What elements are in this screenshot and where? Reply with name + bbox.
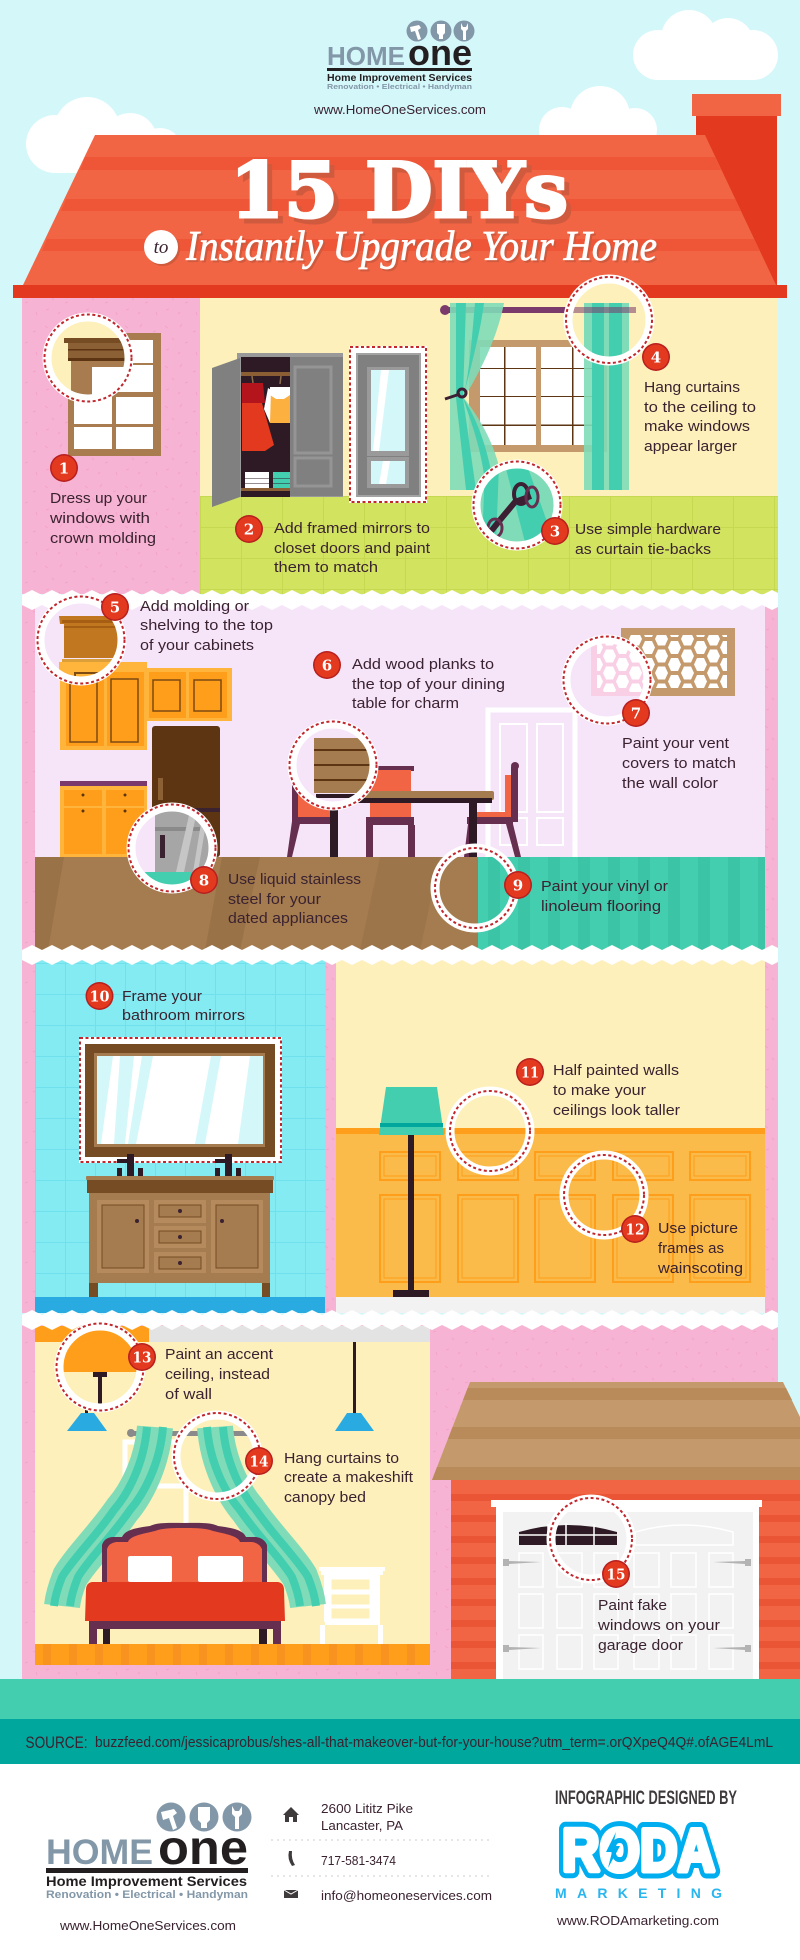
step 2 text: them to match: [274, 559, 378, 576]
step 13 text: [165, 1346, 274, 1403]
logo wordmark: Home Improvement Services: [327, 72, 472, 84]
step 7 badge: [622, 699, 650, 727]
step 7 text: covers to match: [622, 755, 736, 772]
step 14 text: [284, 1450, 414, 1506]
contact block: [271, 1801, 492, 1903]
cloud: middle: [539, 86, 657, 153]
step 12 text: frames as: [658, 1240, 724, 1257]
callout 11: half painted wall: [450, 1091, 530, 1171]
step 12 badge: [621, 1215, 649, 1243]
bed: [85, 1523, 285, 1644]
title: 15 DIYs: 15 DIYs: [235, 151, 573, 240]
step 3 text: Use simple hardware: [575, 521, 721, 538]
step 15 text: windows on your: [597, 1617, 720, 1634]
curtain rod: [440, 305, 639, 315]
source band: [0, 1719, 800, 1764]
vent cover: [621, 628, 735, 696]
step 1 text: crown molding: [50, 530, 156, 547]
step 15 badge: 15: [606, 1566, 626, 1584]
step 2 badge: 2: [244, 520, 254, 538]
title: [144, 146, 659, 272]
step 5 badge: [101, 593, 129, 621]
RODA logo: RODA: [562, 1817, 715, 1884]
grey ceiling: [149, 1326, 430, 1342]
teal floor: [478, 857, 765, 950]
step 13 text: of wall: [165, 1386, 212, 1403]
step 4 badge: [642, 343, 670, 371]
RODA url: www.RODAmarketing.com: [556, 1913, 719, 1928]
step 8 text: Use liquid stainless: [228, 871, 361, 888]
step 11 text: [553, 1062, 680, 1119]
source band: buzzfeed.com/jessicaprobus/shes-all-that-makeover-but-for-your-house?utm_term=.orQXpeQ4Q#.ofAGE4LmL: [95, 1735, 773, 1751]
garage roof: [432, 1382, 800, 1480]
logo wordmark: one: [408, 32, 472, 73]
callout 13: accent ceiling: [56, 1324, 144, 1412]
dotted dividers: [271, 1840, 491, 1876]
callout 8: stainless fridge: [128, 804, 216, 897]
footer logo wordmark: one: [158, 1822, 248, 1875]
step 7 badge: 7: [631, 704, 641, 722]
divider zigzag under floor 2: [22, 960, 778, 965]
floor divider 3: [22, 1310, 778, 1325]
callout 1: crown molding: [44, 314, 132, 417]
dining chairs: [287, 762, 521, 857]
step 10 badge: 10: [90, 988, 110, 1006]
chimney: [692, 94, 781, 288]
address: [321, 1801, 413, 1833]
MARKETING: MARKETING: [555, 1885, 722, 1901]
canopy curtain rod: [127, 1429, 244, 1437]
bathroom mirror: [79, 1037, 282, 1163]
lilac wall: [35, 605, 765, 857]
footer logo url: www.HomeOneServices.com: [59, 1918, 236, 1933]
floor 3 strips: [22, 960, 778, 1313]
step 2 text: [274, 520, 431, 576]
callout 9: painted floor: [435, 848, 515, 928]
step 10 text: bathroom mirrors: [122, 1007, 245, 1024]
step 15 text: [597, 1597, 720, 1654]
step 9 badge: 9: [513, 876, 523, 894]
step 12 text: [657, 1220, 743, 1277]
wall cream: [200, 298, 778, 496]
step 4 text: Hang curtains: [644, 379, 740, 396]
middle chair: [366, 766, 415, 857]
step 4 text: [644, 379, 756, 455]
step 14 badge: 14: [250, 1452, 268, 1470]
subtitle: Instantly Upgrade Your Home: [185, 224, 657, 270]
left chair: [287, 778, 335, 857]
logo wordmark: Renovation • Electrical • Handyman: [327, 82, 472, 91]
step 6 badge: [313, 651, 341, 679]
step 3 badge: 3: [550, 522, 560, 540]
footer logo wordmark: Home Improvement Services: [46, 1873, 247, 1889]
bedroom wall: [35, 1342, 430, 1665]
step 12 text: wainscoting: [657, 1260, 743, 1277]
step 8 text: dated appliances: [228, 910, 348, 927]
bathroom floor: [35, 1297, 325, 1313]
bathroom wall: [35, 960, 325, 1297]
floor 1 room: [22, 298, 778, 594]
faucets: [117, 1154, 241, 1176]
cloud: left: [26, 97, 182, 173]
address: 2600 Lititz Pike: [321, 1801, 413, 1816]
step 5 badge: 5: [110, 598, 120, 616]
side walls: [22, 605, 35, 950]
step 5 text: [140, 598, 273, 654]
step 10 text: Frame your: [122, 988, 202, 1005]
framed mirror closet door: [349, 346, 427, 503]
dining table: [316, 791, 494, 857]
RODA logo: RODA: [562, 1817, 715, 1884]
callout 5: cabinet molding: [38, 596, 124, 693]
step 3 text: as curtain tie-backs: [575, 541, 711, 558]
ground band: [0, 1679, 800, 1719]
step 2 text: Add framed mirrors to: [274, 520, 430, 537]
step 1 badge: 1: [59, 460, 69, 478]
closet with open door: [212, 353, 343, 507]
orange floor: [35, 1644, 430, 1665]
phone: 717-581-3474: [321, 1853, 396, 1868]
step 13 text: Paint an accent: [165, 1346, 274, 1363]
step 4 text: to the ceiling to: [644, 399, 756, 416]
step 11 badge: [516, 1058, 544, 1086]
callout 6: wood planks: [290, 722, 376, 808]
icon: house: [283, 1807, 299, 1822]
step 3 badge: [541, 517, 569, 545]
fake window: [519, 1523, 617, 1545]
floor lamp: [379, 1087, 444, 1297]
clothes: [241, 372, 290, 491]
icon: mail: [284, 1890, 298, 1898]
vanity: [86, 1176, 274, 1297]
bedroom: [35, 1326, 430, 1665]
step 14 text: Hang curtains to: [284, 1450, 399, 1467]
wainscoting: [336, 1128, 765, 1297]
step 2 badge: [235, 515, 263, 543]
door: [488, 710, 575, 857]
canopy curtains: [54, 1427, 316, 1606]
step 12 badge: 12: [626, 1220, 644, 1238]
window with crown molding: [68, 333, 161, 456]
right curtain: [584, 303, 629, 490]
left curtain: [450, 303, 504, 490]
logo icons: [406, 20, 474, 42]
designer credit: [555, 1788, 737, 1928]
footer logo icons: [156, 1802, 252, 1832]
step 7 text: Paint your vent: [622, 735, 730, 752]
step 11 text: ceilings look taller: [553, 1102, 680, 1119]
footer logo wordmark: [46, 1822, 248, 1901]
step 13 badge: 13: [132, 1348, 152, 1366]
accent ceiling: [35, 1326, 149, 1342]
step 10 badge: [86, 982, 114, 1010]
divider zigzag under floor 1: [22, 605, 778, 610]
upper cabinets: [60, 662, 232, 750]
step 5 text: shelving to the top: [140, 617, 273, 634]
roof: [23, 135, 776, 285]
window behind curtains: [469, 340, 607, 452]
subtitle: to: [154, 237, 168, 258]
step 3 text: [575, 521, 721, 558]
callout 15: fake window: [550, 1498, 632, 1580]
step 8 text: [228, 871, 361, 927]
address: Lancaster, PA: [321, 1818, 403, 1833]
step 5 text: Add molding or: [140, 598, 249, 615]
step 4 text: make windows: [644, 418, 750, 435]
bedroom window: [125, 1442, 247, 1534]
floor 4 wall: [22, 1325, 778, 1679]
yellow wall: [336, 960, 765, 1128]
green floor: [200, 496, 778, 594]
subtitle: Instantly Upgrade Your Home: [187, 226, 659, 272]
footer white: [0, 1764, 800, 1960]
left canopy curtain: [54, 1427, 163, 1606]
step 1 text: windows with: [49, 510, 150, 527]
title: 15 DIYs: 15 DIYs: [230, 146, 568, 235]
footer logo wordmark: HOME: [46, 1833, 153, 1872]
step 12 text: Use picture: [658, 1220, 738, 1237]
tie-back: [445, 389, 466, 399]
eave: [13, 285, 787, 298]
callout 7: painted vent: [564, 635, 651, 724]
step 13 badge: [128, 1343, 156, 1371]
step 8 text: steel for your: [228, 891, 321, 908]
callout 4: curtains to ceiling: [566, 277, 652, 383]
footer logo wordmark: Renovation • Electrical • Handyman: [46, 1889, 248, 1901]
step 1 text: [49, 490, 156, 547]
refrigerator: [152, 726, 220, 857]
garage wall: [451, 1480, 800, 1679]
footer logo: Home One: [46, 1802, 252, 1933]
callout 14: canopy curtain: [170, 1413, 260, 1510]
step 15 badge: [602, 1560, 630, 1588]
step 4 badge: 4: [651, 348, 661, 366]
lower cabinets: [60, 781, 147, 857]
step 9 text: Paint your vinyl or: [541, 878, 668, 895]
pillows: [128, 1556, 243, 1582]
step 5 text: of your cabinets: [140, 637, 254, 654]
right chair: [464, 762, 521, 857]
floor divider 1: [22, 590, 778, 605]
step 4 text: appear larger: [644, 438, 737, 455]
step 8 badge: 8: [199, 872, 209, 890]
step 6 text: [352, 656, 505, 712]
step 6 badge: 6: [322, 656, 332, 674]
step 1 badge: [50, 454, 78, 482]
step 7 text: [622, 735, 736, 792]
step 6 text: Add wood planks to: [352, 656, 494, 673]
step 9 badge: [504, 871, 532, 899]
step 7 text: the wall color: [622, 775, 718, 792]
logo url: www.HomeOneServices.com: [313, 102, 486, 117]
hinges: [503, 1559, 751, 1652]
callout 12: picture frames: [564, 1155, 644, 1235]
step 15 text: garage door: [598, 1637, 683, 1654]
step 14 badge: [245, 1447, 273, 1475]
floor 2 room: [22, 605, 778, 950]
callout 3: tie-back: [474, 462, 560, 550]
step 10 text: [122, 988, 245, 1024]
logo: Home One top: [313, 20, 486, 117]
step 13 text: ceiling, instead: [165, 1366, 270, 1383]
step 11 text: to make your: [553, 1082, 646, 1099]
headboard: [102, 1523, 267, 1582]
step 8 badge: [190, 866, 218, 894]
source band: SOURCE:: [26, 1733, 88, 1752]
step 14 text: create a makeshift: [284, 1469, 414, 1486]
logo wordmark: [327, 32, 472, 91]
step 6 text: the top of your dining: [352, 676, 505, 693]
logo wordmark: HOME: [327, 41, 405, 71]
garage door: [491, 1500, 762, 1679]
email: info@homeoneservices.com: [321, 1888, 492, 1903]
step 9 text: linoleum flooring: [541, 898, 661, 915]
mattress: [85, 1582, 285, 1621]
step 15 text: Paint fake: [598, 1597, 667, 1614]
pendant lamps: [67, 1342, 374, 1431]
frame: [89, 1621, 281, 1644]
floor divider 2: [22, 945, 778, 960]
garage: [432, 1382, 800, 1679]
step 1 text: Dress up your: [50, 490, 147, 507]
wall pink: [22, 298, 200, 594]
step 6 text: table for charm: [352, 695, 459, 712]
icon: phone: [288, 1851, 295, 1866]
step 11 text: Half painted walls: [553, 1062, 679, 1079]
divider zigzag under floor 3: [22, 1325, 778, 1330]
step 9 text: [541, 878, 668, 915]
nightstand: [319, 1567, 385, 1644]
step 2 text: closet doors and paint: [274, 540, 431, 557]
white-grey floor: [336, 1297, 765, 1313]
wood floor: [35, 857, 478, 950]
cloud: right: [633, 10, 778, 80]
step 14 text: canopy bed: [284, 1489, 366, 1506]
step 11 badge: 11: [521, 1064, 539, 1082]
right canopy curtain: [207, 1427, 316, 1606]
